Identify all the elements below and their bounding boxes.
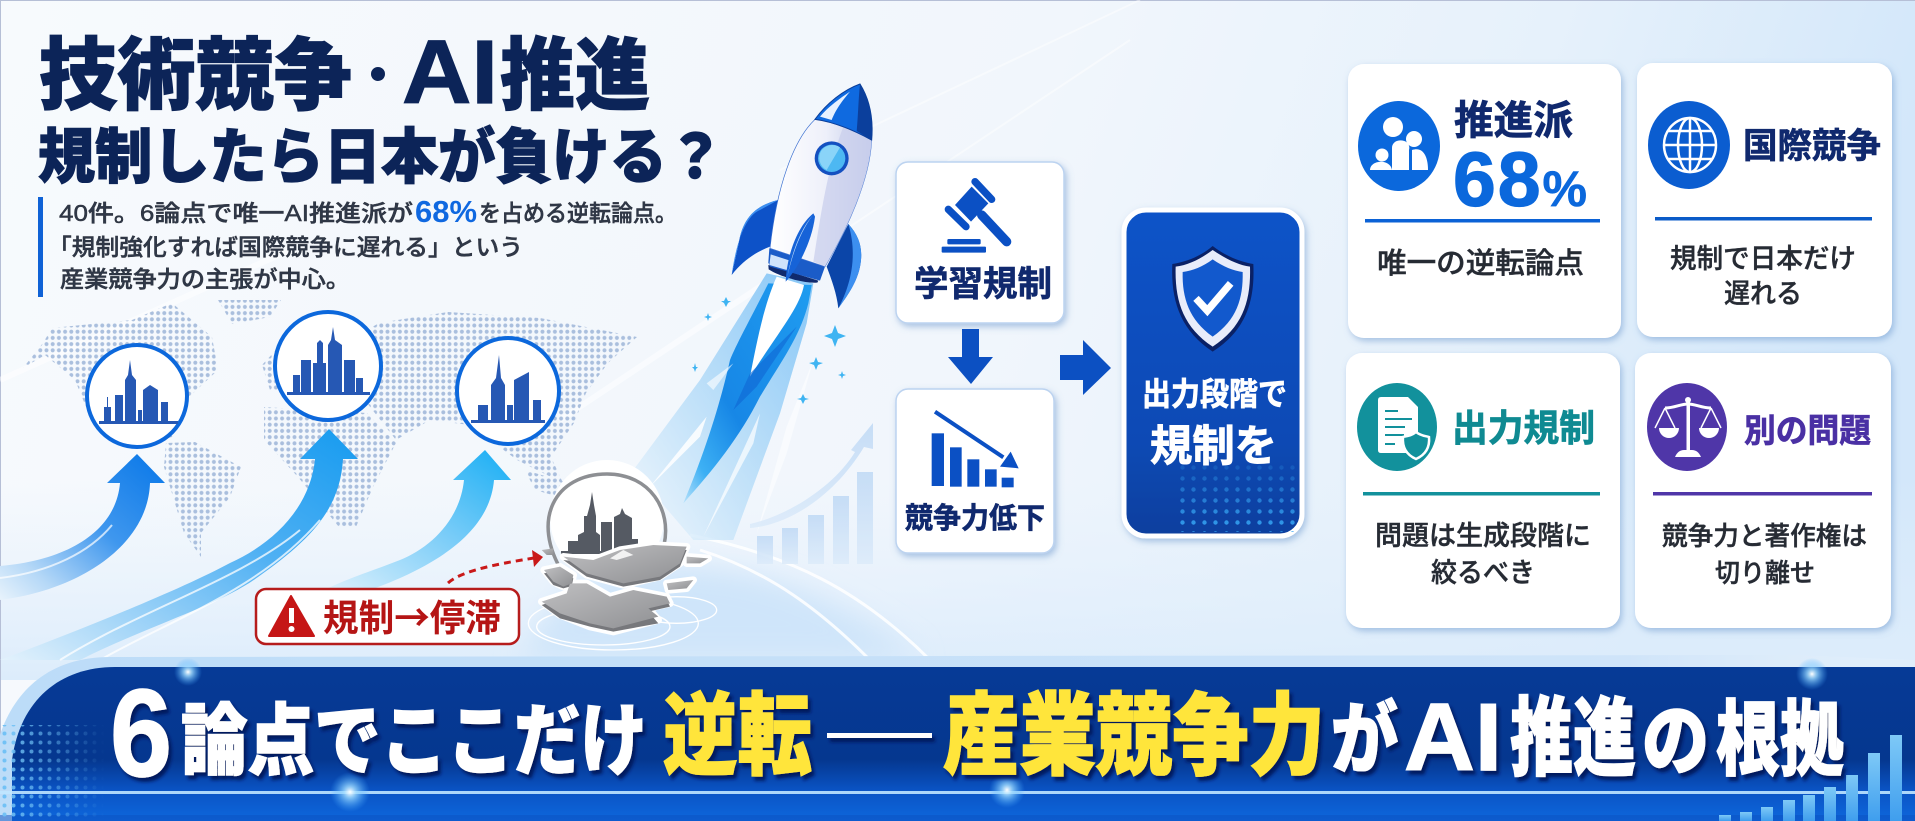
arrow: right [1060,340,1111,395]
summary text: 産業競争力の主張が中心。 [60,266,350,292]
panel: international competition [1637,63,1892,337]
banner headline: 逆転 [663,687,812,787]
panel: output regulation: 絞るべき [1431,558,1535,588]
rising arrow 2 [0,429,358,660]
banner headline: の [1642,697,1709,785]
sparkles [692,297,846,404]
summary text: 40件。6論点で唯一AI推進派が [59,200,413,226]
summary text: を占める逆転論点。 [479,200,677,226]
banner headline: 6 [110,665,172,803]
Japan island shapes [528,545,717,650]
title: 規制したら日本が負ける？ [38,124,724,191]
panel: pro-AI 68%: 68% [1453,137,1587,223]
callout: regulation to stagnation: 規制→停滞 [323,588,501,642]
panel: international competition: 国際競争 [1743,127,1881,166]
summary text [38,194,677,297]
panel: output regulation [1346,353,1620,628]
city circle 2 [275,312,381,420]
banner headline: 推進 [1510,691,1636,787]
icon: scales [1647,383,1727,471]
arrow: down [948,329,993,384]
banner headline: が [1331,695,1398,783]
banner headline: 根拠 [1716,695,1844,786]
banner headline: AI [1404,684,1502,791]
panel: output regulation: 問題は生成段階に [1375,521,1591,551]
panel: separate issue: 切り離せ [1715,558,1815,588]
panel: output-stage regulation: 出力段階で [1142,376,1287,412]
callout: regulation to stagnation [256,588,519,644]
summary text: 「規制強化すれば国際競争に遅れる」という [48,234,523,260]
icon: gavel [942,182,1007,253]
icon: globe [1648,101,1730,189]
summary text: 68% [415,194,477,229]
panel: international competition: 規制で日本だけ [1670,244,1856,274]
panel: output regulation: 出力規制 [1452,408,1595,449]
card: learning regulation [896,162,1064,323]
panel: international competition: 遅れる [1724,279,1802,309]
card: learning regulation: 学習規制 [914,265,1052,304]
panel: output-stage regulation [1124,210,1302,536]
panel: output-stage regulation: 規制を [1150,423,1277,471]
banner headline [110,665,1844,803]
card: falling competitiveness: 競争力低下 [905,502,1045,535]
icon: document with shield [1357,383,1437,471]
bottom banner [0,655,1915,821]
rocket [732,84,872,308]
banner headline: 産業競争力 [943,687,1325,787]
panel: separate issue: 競争力と著作権は [1662,521,1867,551]
panel: separate issue [1635,353,1891,628]
icon: shield [1172,246,1254,352]
title [38,23,724,191]
Japan islands with dome [528,460,717,650]
dashed red arrow [448,550,543,583]
panel: pro-AI 68%: 推進派 [1454,99,1573,143]
rising arrow 3 [305,450,511,600]
banner headline: 論点でここだけ [181,697,647,785]
world dot map [23,300,637,557]
panel: separate issue: 別の問題 [1744,412,1871,449]
icon: declining bars [932,412,1019,487]
city circle 1 [87,345,187,447]
icon: people [1358,101,1440,191]
panel: pro-AI 68%: 唯一の逆転論点 [1377,247,1584,280]
growth chart [750,423,873,564]
rising arrow 1 [0,454,165,600]
card: falling competitiveness [896,389,1054,553]
title: AI [402,23,498,123]
city circle 3 [457,338,559,444]
title: 推進 [500,31,650,120]
rocket flame [633,273,813,540]
panel: pro-AI 68% [1348,64,1621,338]
title: 技術競争 [39,31,352,120]
